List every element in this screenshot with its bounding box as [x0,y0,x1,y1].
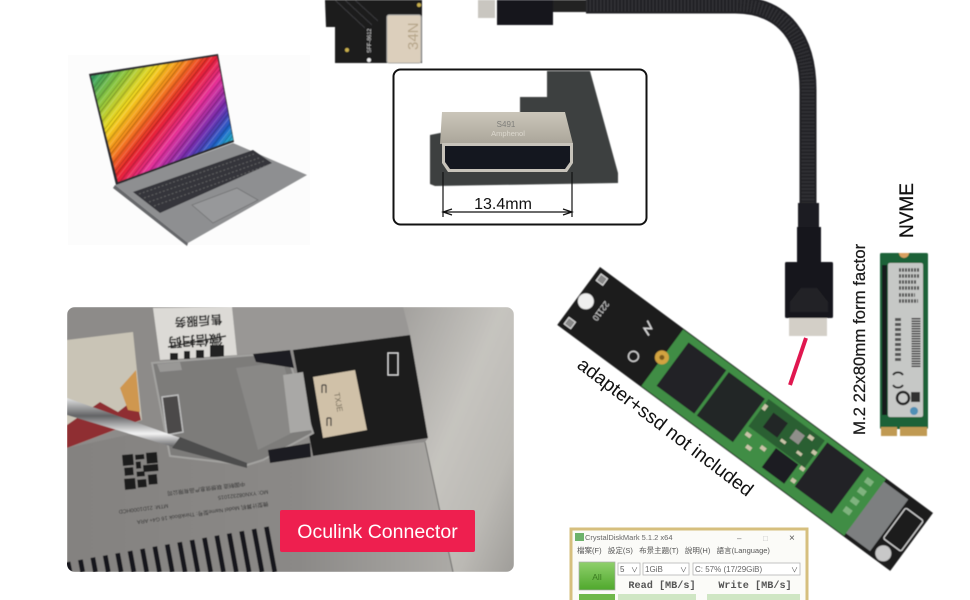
read column heading: Read [MB/s] [628,580,696,592]
SSD green PCB [880,253,928,429]
left strain relief [553,0,588,12]
image backdrop [68,55,310,245]
cover top tab [157,362,182,372]
keyboard keys [139,154,268,206]
adapter marking: 22110 [590,299,611,323]
result row [579,594,800,600]
dimension lines [443,172,572,217]
right plug housing [785,262,833,318]
SSD left strip [882,265,887,415]
window icon [575,533,584,541]
right casing [403,307,514,572]
upper casing highlight [232,307,410,355]
panel: laptop oculink photo: 售后服务 [174,312,223,330]
red callout line [790,338,806,385]
dark PCB [430,71,618,186]
laptop screen frame [89,54,234,185]
test count dropdown [618,563,640,575]
window maximize: □ [763,534,768,543]
mounting hole [575,290,597,312]
screwdriver [67,398,186,449]
black port cutout [293,335,428,456]
drive dropdown: ∨ [791,567,798,574]
oculink socket [883,508,923,551]
badge: Oculink Connector [280,510,475,552]
small black PCB with connector [325,0,422,63]
connector opening [442,143,573,172]
oculink port [313,370,367,438]
test count dropdown: ∨ [631,567,638,574]
window close: × [789,533,795,544]
frame [394,70,646,224]
corner pads [596,274,607,285]
left plug housing [497,0,553,25]
port marking: TXJE [332,392,344,413]
cover handle [283,372,312,433]
All button: All [592,572,602,582]
M.2 gray section [846,482,908,551]
form factor label: M.2 22x80mm form factor [850,243,869,435]
M.2 adapter board with SSD [557,267,933,571]
test count dropdown: 5 [620,565,625,574]
drive dropdown: C: 57% (17/29GiB) [695,565,762,574]
right strain relief [798,203,819,228]
controller area [748,399,825,468]
panel: laptop oculink photo [67,307,514,572]
left plug metal [478,0,495,18]
colored sticker [67,332,142,434]
SSD text blocks and barcodes [899,270,919,301]
connector marking: 34N [405,22,422,50]
printed model text: MTM: 21D1000HCD [118,502,168,514]
capacitor [872,542,894,565]
printed model text: MO: YXN082321015 [217,488,268,500]
NVME label: NVME [897,183,918,238]
SSD mount notch [899,253,909,258]
lower casing [67,430,453,572]
window frame [571,529,807,600]
NAND chip 2 [697,372,765,442]
printed model text [118,480,269,526]
QR code [122,452,160,490]
photo background [67,307,428,464]
shell top [440,112,573,144]
printed model text: 中国制造 联想信息产品有限公司 [167,480,246,498]
PCB traces [335,0,378,28]
All button [579,562,615,590]
adapter black board [557,267,933,571]
laptop keyboard [133,150,272,213]
braided cable [586,5,808,206]
test size dropdown: ∨ [680,567,687,574]
SSD white label [888,263,923,417]
cover slot [162,395,183,435]
badge: Oculink Connector: Oculink Connector [297,521,458,543]
NVMe SSD module [880,253,928,436]
laptop touchpad [192,188,258,223]
SSD gold contacts [881,427,897,436]
callout panel: 13.4mm connector [394,70,646,224]
shell marking S491: S491 [497,120,516,129]
shell marking Amphenol: Amphenol [491,129,525,138]
gold standoff [652,348,672,367]
laptop rainbow screen [90,55,234,183]
right plug metal [789,318,827,336]
gray plastic cover [152,355,313,465]
label text: 微信扫码 [168,331,223,351]
PCB part number: SFF-8612 [367,29,373,53]
CrystalDiskMark window [571,529,807,600]
DRAM chip [762,448,798,484]
test size dropdown [643,563,689,575]
window title: CrystalDiskMark 5.1.2 x64 [585,533,673,542]
adapter logo [626,349,640,363]
PCB connector [387,15,421,63]
dimension arrows [443,209,572,215]
white service label [153,307,237,360]
cover black pads [253,350,294,368]
SSD certification marks [897,392,909,404]
window minimize: – [737,534,742,543]
laptop base [115,143,307,243]
write column heading: Write [MB/s] [718,580,792,592]
note: adapter+ssd not included: adapter+ssd not included [573,354,757,501]
NAND chip 1 [656,342,726,414]
PCB pads [417,3,421,7]
NAND chip 3 [795,442,864,514]
menu bar: 檔案(F) 設定(S) 布景主題(T) 說明(H) 語言(Language) [577,545,770,555]
PCB outline marking [388,353,398,375]
green SSD PCB [641,330,886,536]
laptop image [88,53,308,246]
boot [797,227,821,263]
printed model text: 微型计算机 Model Name型号: ThinkBook 16 G4+ ARA [136,500,269,526]
test size dropdown: 1GiB [645,565,663,574]
dimension label: 13.4mm [474,196,532,213]
vents [68,527,275,572]
oculink cable [478,0,833,336]
drive dropdown [693,563,800,575]
